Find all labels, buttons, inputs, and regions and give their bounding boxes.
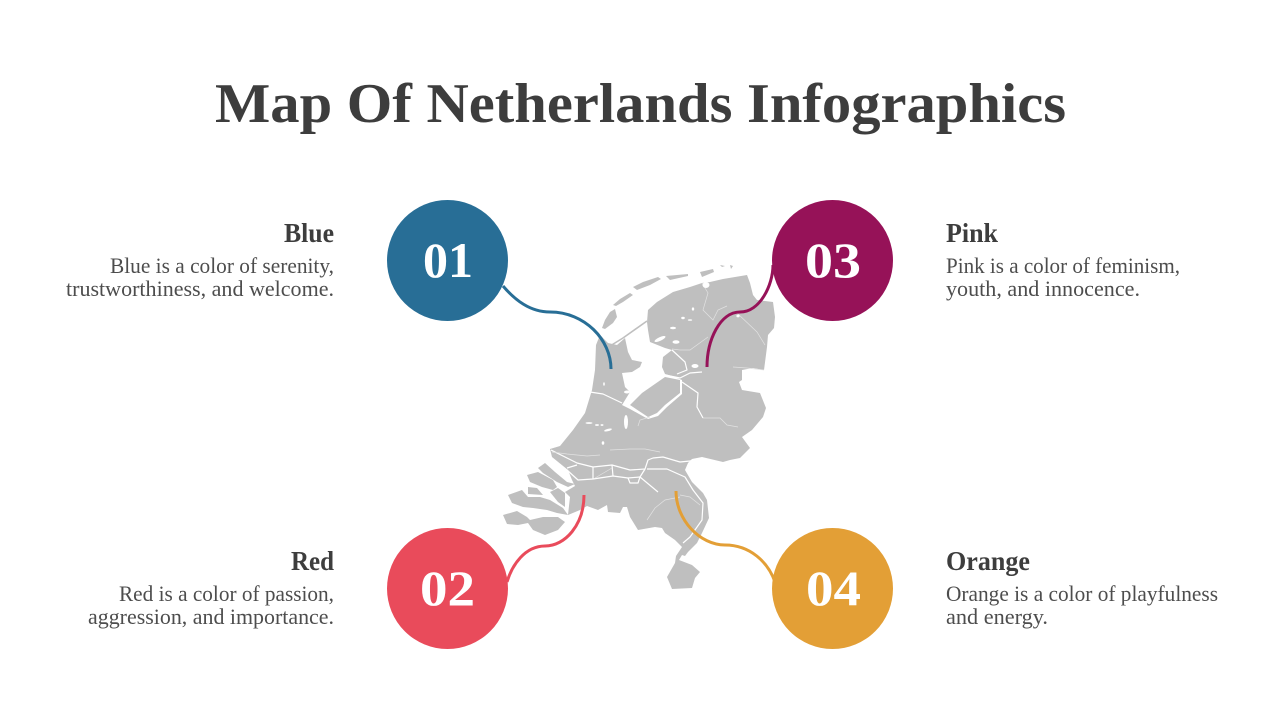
badge: 03: [772, 200, 893, 321]
heading: Orange: Orange: [946, 546, 1030, 576]
text: blue description: trustworthiness, and welcome.: [66, 276, 334, 301]
map of the Netherlands: [503, 265, 775, 589]
text: red description: [88, 581, 334, 629]
panel: blue: [66, 200, 611, 369]
IJsselmeer shore channels: [672, 350, 687, 374]
text: orange description: and energy.: [946, 604, 1048, 629]
number 01: 01: [423, 232, 473, 288]
panel: orange: [676, 491, 1218, 649]
lakes: [586, 282, 740, 445]
number 02: 02: [420, 560, 475, 616]
number 04: 04: [806, 560, 861, 616]
text: orange description: Orange is a color of playfulness: [946, 581, 1218, 606]
connector: red: [507, 495, 584, 582]
heading: Red: Red: [291, 546, 334, 576]
number 03: 03: [805, 232, 861, 288]
text: orange description: [946, 581, 1218, 629]
title: Map Of Netherlands Infographics: [215, 73, 1066, 135]
text: blue description: [66, 253, 334, 301]
text: pink description: [946, 253, 1180, 301]
Zeeland islands: [503, 463, 575, 535]
panel: red: [88, 495, 584, 649]
connector: blue: [503, 286, 611, 369]
rivers: [551, 283, 765, 543]
panel: pink: [707, 200, 1180, 367]
connector: pink: [707, 265, 773, 367]
badge: 04: [772, 528, 893, 649]
Wadden islands: [602, 265, 733, 329]
heading: Pink: Pink: [946, 218, 998, 248]
text: red description: aggression, and importance.: [88, 604, 334, 629]
badge: 01: [387, 200, 508, 321]
text: pink description: Pink is a color of feminism,: [946, 253, 1180, 278]
connector: orange: [676, 491, 775, 582]
heading: Blue: Blue: [284, 218, 334, 248]
badge: 02: [387, 528, 508, 649]
mainland: [550, 275, 775, 589]
text: blue description: Blue is a color of serenity,: [110, 253, 334, 278]
Afsluitdijk: [610, 321, 647, 346]
text: red description: Red is a color of passion,: [119, 581, 334, 606]
text: pink description: youth, and innocence.: [946, 276, 1140, 301]
Flevoland: [630, 377, 680, 417]
